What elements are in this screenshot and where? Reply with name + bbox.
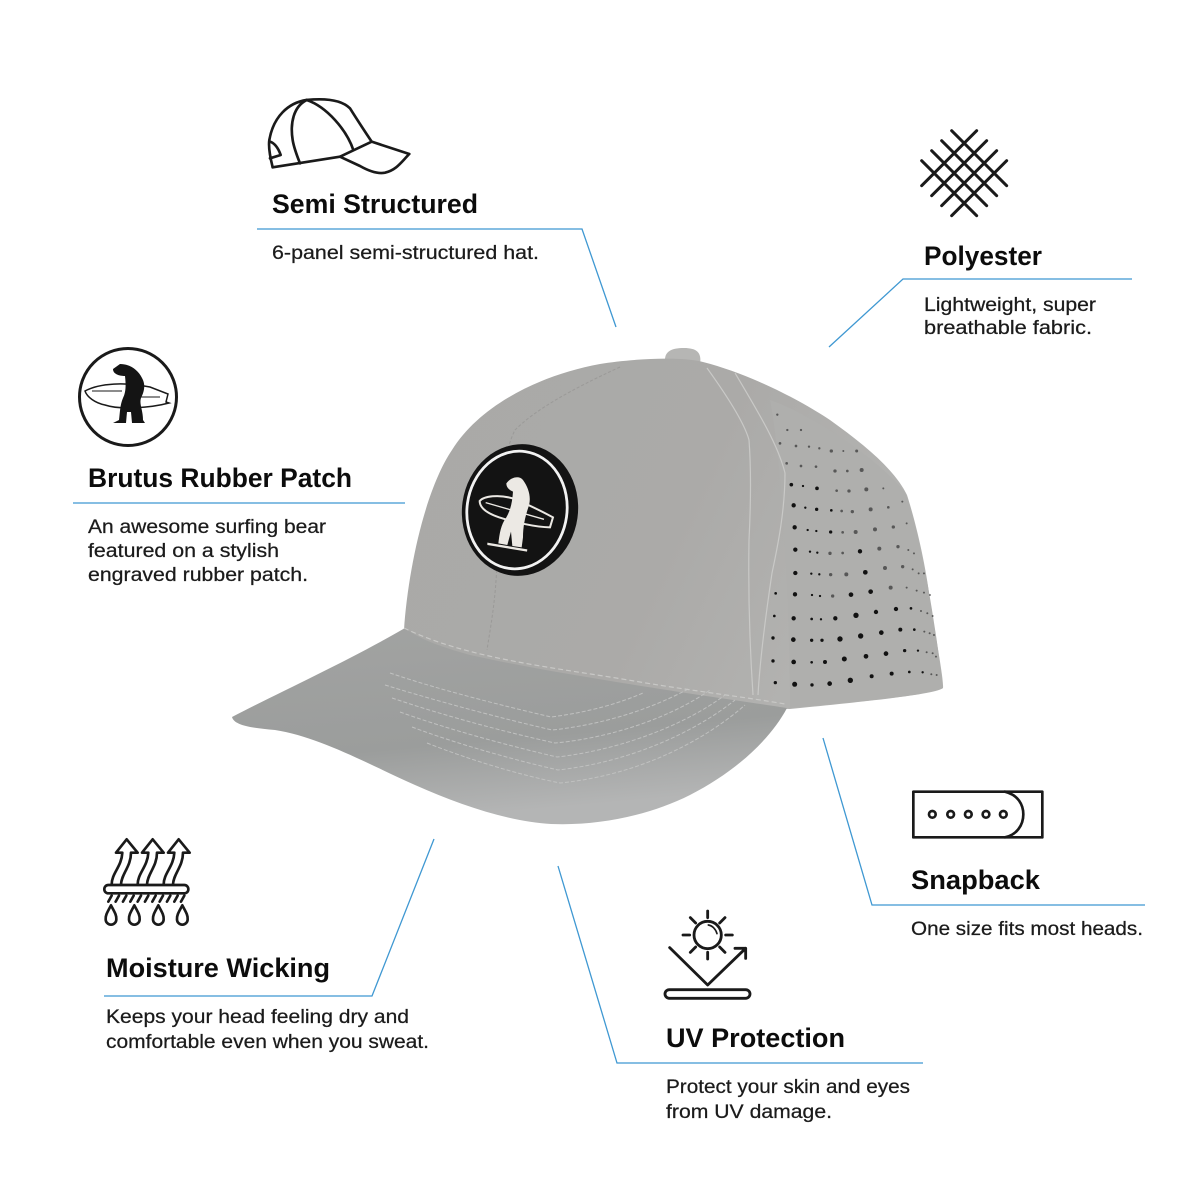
brim stitching (385, 673, 745, 783)
hat top button (665, 348, 700, 364)
hat brim (232, 628, 787, 824)
heading: Moisture Wicking (106, 953, 330, 983)
hat photo illustration (232, 348, 943, 824)
icon: uv reflection (665, 911, 750, 998)
description: from UV damage. (666, 1101, 832, 1123)
heading: Polyester (924, 241, 1042, 271)
icon: strap (913, 792, 1042, 837)
description: Lightweight, super (924, 294, 1097, 316)
icon: cap (269, 99, 409, 173)
description: engraved rubber patch. (88, 564, 308, 586)
panel: uv protection (558, 866, 923, 1123)
leader line (104, 839, 434, 996)
description: One size fits most heads. (911, 918, 1143, 940)
heading: Semi Structured (272, 189, 478, 219)
description: comfortable even when you sweat. (106, 1031, 429, 1053)
description: An awesome surfing bear (88, 516, 327, 538)
panel: polyester (829, 131, 1132, 347)
heading: Brutus Rubber Patch (88, 463, 352, 493)
heading: UV Protection (666, 1023, 845, 1053)
leader line (829, 279, 1132, 347)
panel: brutus rubber patch (73, 348, 405, 586)
rubber patch (453, 437, 587, 583)
patch bear and surfboard (480, 477, 553, 552)
perforations (771, 413, 938, 687)
description: featured on a stylish (88, 540, 279, 562)
heading: Snapback (911, 865, 1041, 895)
leader line (823, 738, 1145, 905)
leader line (73, 502, 405, 504)
panel: snapback (823, 738, 1145, 940)
brim seam stitching (404, 628, 785, 704)
panel: semi structured (257, 99, 616, 327)
description: Keeps your head feeling dry and (106, 1006, 409, 1028)
panel: moisture wicking (104, 839, 434, 1053)
icon: wicking (104, 839, 190, 925)
icon: bear badge (80, 348, 176, 446)
description: breathable fabric. (924, 317, 1092, 339)
description: 6-panel semi-structured hat. (272, 242, 539, 264)
leader line (558, 866, 923, 1063)
hat crown (400, 359, 943, 709)
mesh side shading (770, 400, 943, 708)
icon: mesh (922, 131, 1007, 216)
crown stitching (487, 367, 785, 695)
description: Protect your skin and eyes (666, 1076, 910, 1098)
leader line (257, 229, 616, 327)
